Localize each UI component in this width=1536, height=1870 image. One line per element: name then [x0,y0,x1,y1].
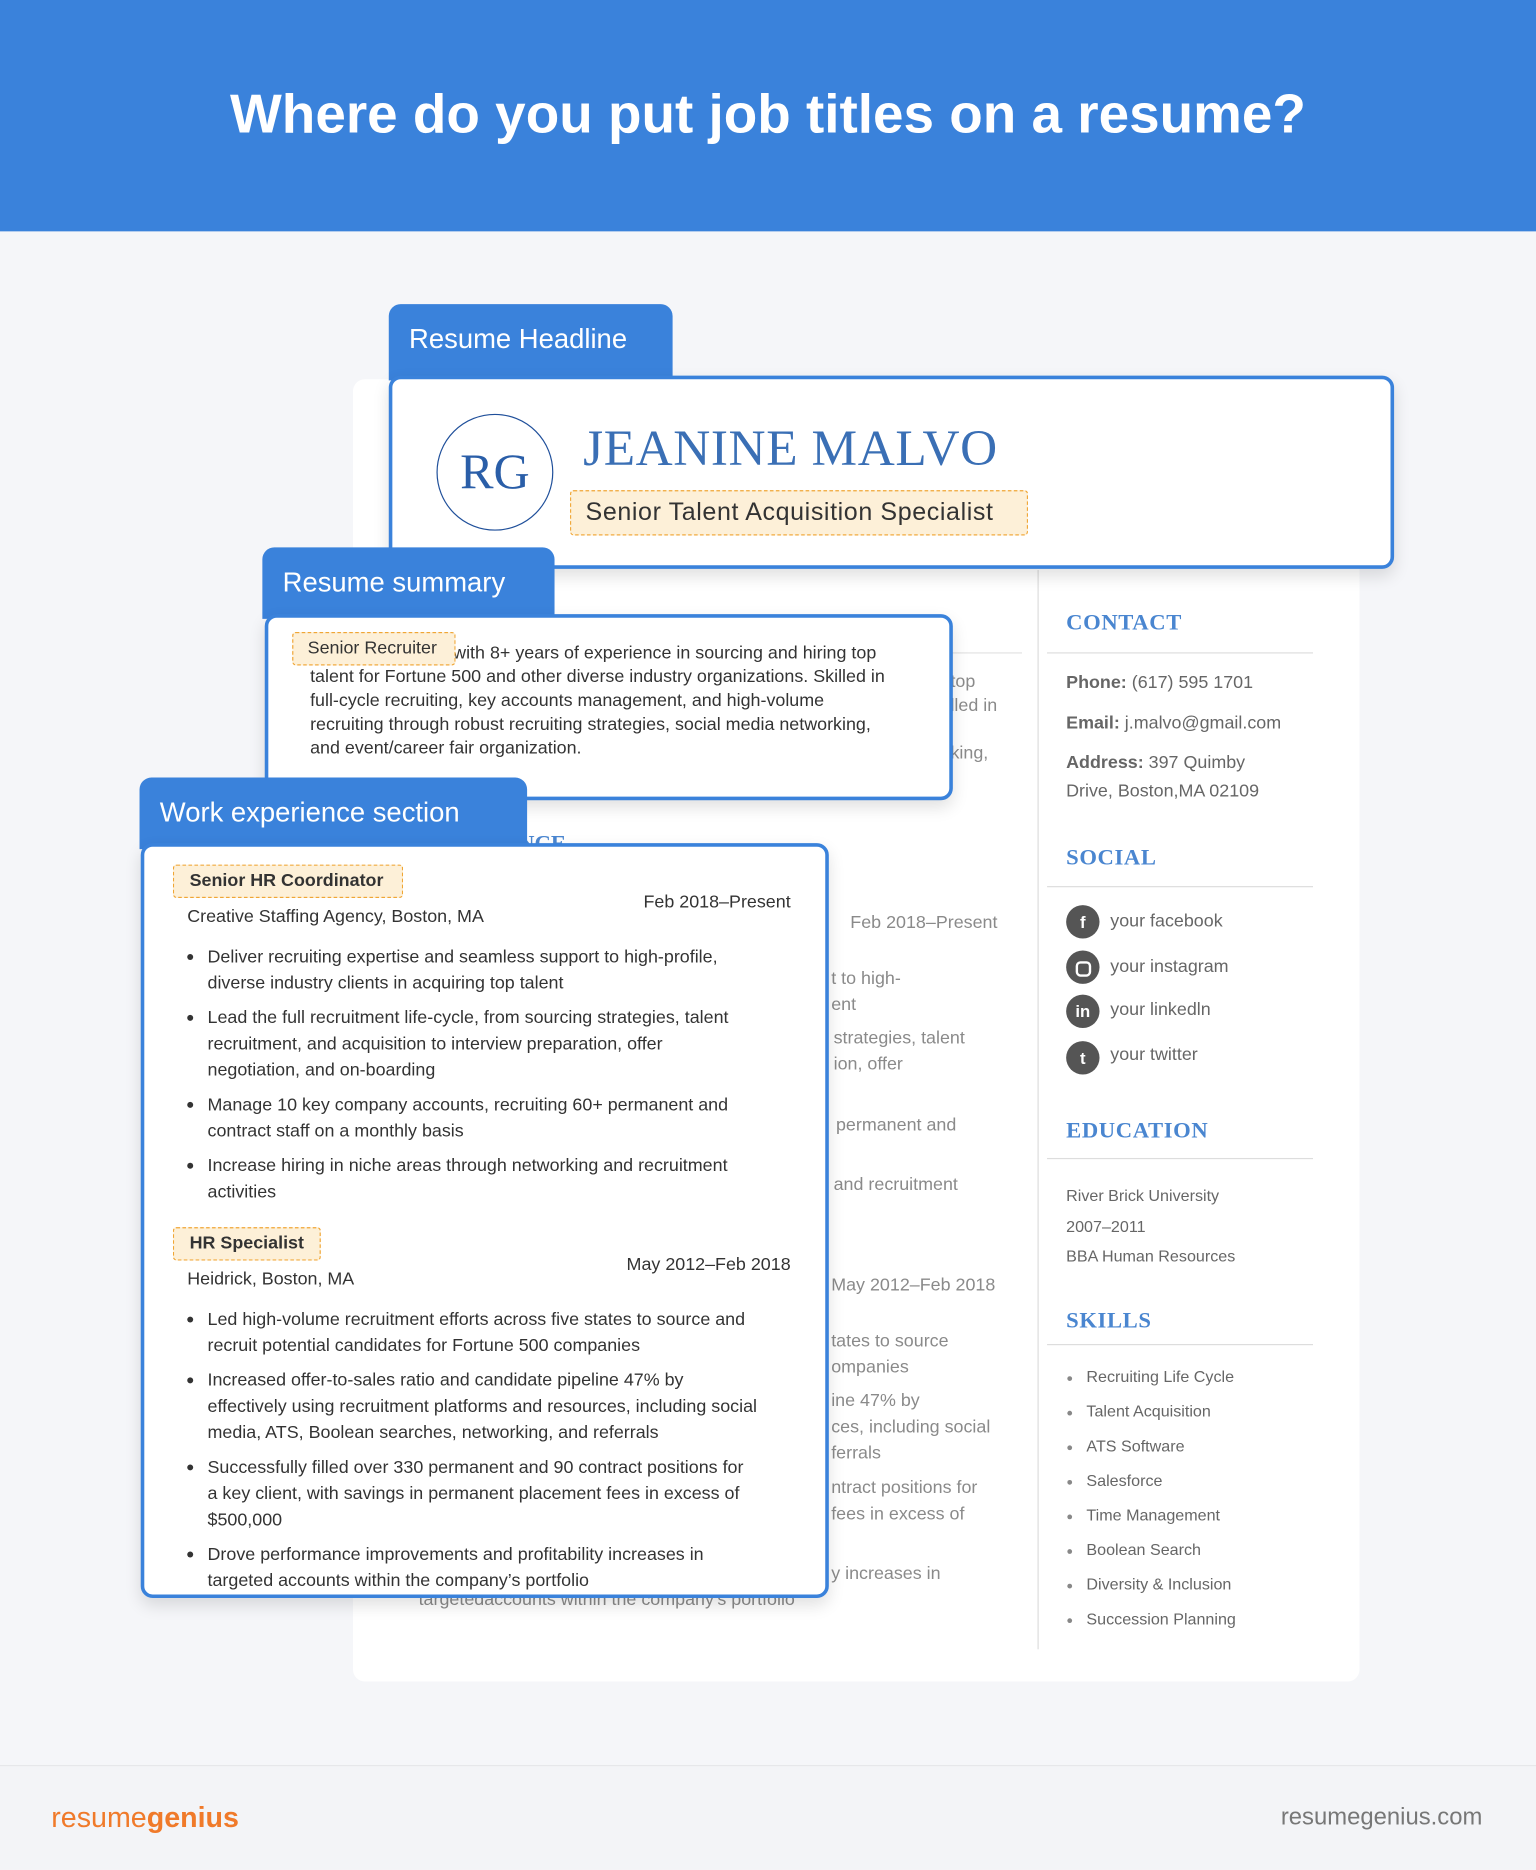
experience heading (hidden): EXPERIENCE [417,831,566,856]
text: SKILLS [1066,1308,1152,1333]
text: ompanies [831,1357,909,1377]
text: ATS Software [1086,1437,1185,1455]
card: work experience [141,843,829,1598]
text: Email: j.malvo@gmail.com [1066,713,1281,733]
icon: linkedin: in [1075,1002,1090,1021]
tab: resume summary: Resume summary [283,566,505,597]
text: your twitter [1110,1045,1198,1065]
icon: RG monogram: RG [460,445,530,500]
summary text: with 8+ years of experience in sourcing and hiring top talent for Fortune 500 and other diverse industry organizations. Skilled in full-cycle recruiting, key accounts management, and high-volume recruiting through robust recruiting strategies, social media networking, and event/career fair organization. [310,643,885,758]
job 2: Drove performance improvements and profitability increases in targeted accounts within the company’s portfolio [208,1544,704,1591]
faded background text [140,619,998,1610]
badge: senior recruiter [292,632,456,665]
text: your instagram [1110,956,1229,977]
footer [0,1765,1536,1870]
card: headline [389,376,1394,569]
left column divider [417,652,1022,654]
job 2: Led high-volume recruitment efforts across five states to source and recruit potential candidates for Fortune 500 companies [208,1309,745,1356]
icon: twitter: t [1080,1048,1086,1067]
tab: resume summary [262,547,555,619]
text: fees in excess of [831,1504,964,1524]
text: king, [950,743,988,763]
text: Boolean Search [1086,1541,1201,1559]
text: Recruiting Life Cycle [1086,1368,1234,1386]
sidebar: education [1047,1119,1313,1265]
text: tates to source [831,1331,949,1351]
job 1: Creative Staffing Agency, Boston, MA [187,906,484,927]
text: targetedaccounts within the company's portfolio [419,1590,795,1610]
icon: instagram [1066,950,1100,984]
text: ine 47% by [831,1391,920,1411]
job 1: Increase hiring in niche areas through networking and recruitment activities [208,1156,728,1202]
tab: work experience [140,778,527,849]
text: lled in [950,695,997,716]
job 1: Lead the full recruitment life-cycle, from sourcing strategies, talent recruitment, and acquisition to interview preparation, offer negotiation, and on-boarding [208,1008,728,1080]
job 1 [173,864,791,1202]
text: May 2012–Feb 2018 [831,1275,995,1295]
sidebar divider [1038,570,1039,1649]
job title badge: Senior Talent Acquisition Specialist [586,498,994,526]
text: Succession Planning [1086,1610,1236,1628]
resume paper background [353,379,1360,1681]
text: y increases in [831,1563,941,1584]
badge: senior recruiter: Senior Recruiter [308,638,437,658]
sidebar: social [1047,846,1313,1074]
job 1: Senior HR Coordinator [190,871,383,891]
text: Phone: (617) 595 1701 [1066,673,1253,693]
job 2: May 2012–Feb 2018 [627,1255,791,1275]
text: strategies, talent [834,1028,965,1048]
text: CONTACT [1066,611,1182,636]
job 1: Deliver recruiting expertise and seamless support to high-profile, diverse industry clients in acquiring top talent [208,947,718,993]
text: top [950,671,975,692]
text: your facebook [1110,911,1223,931]
text: Time Management [1086,1506,1220,1524]
tab: resume headline: Resume Headline [409,323,627,354]
text: 2007–2011 [1066,1217,1146,1235]
text: and recruitment [834,1175,958,1195]
text: ntract positions for [831,1478,977,1498]
text: ent [831,995,856,1015]
icon: facebook [1066,905,1100,939]
job title badge [570,490,1028,535]
sidebar: skills [1047,1308,1313,1628]
url: resumegenius.com [1281,1804,1482,1831]
job 2: Heidrick, Boston, MA [187,1269,354,1289]
text: t to high- [831,968,901,989]
text: ces, including social [831,1417,990,1437]
title: Where do you put job titles on a resume? [230,82,1306,144]
icon: facebook: f [1080,912,1086,931]
text: Drive, Boston,MA 02109 [1066,781,1259,801]
header banner [0,0,1536,231]
text: Address: 397 Quimby [1066,752,1245,773]
text: EDUCATION [1066,1119,1208,1144]
text: River Brick University [1066,1187,1219,1204]
text: Feb 2018–Present [850,912,997,933]
text: SOCIAL [1066,846,1157,871]
job 1: Manage 10 key company accounts, recruiting 60+ permanent and contract staff on a monthly basis [208,1095,728,1141]
card: summary [265,614,953,800]
logo: resumegenius [51,1802,239,1834]
name: JEANINE MALVO [583,421,998,477]
job 2 [173,1227,791,1591]
text: BBA Human Resources [1066,1247,1235,1265]
job 2: HR Specialist [190,1233,304,1253]
sidebar: contact [1047,611,1313,801]
icon: linkedin [1066,995,1100,1028]
text: Salesforce [1086,1472,1162,1489]
text: your linkedln [1110,999,1211,1020]
tab: work experience: Work experience section [160,797,460,828]
job 1: Feb 2018–Present [643,892,791,912]
tab: resume headline [389,304,673,380]
text: Talent Acquisition [1086,1402,1211,1420]
job 2: Successfully filled over 330 permanent and 90 contract positions for a key client, with savings in permanent placement fees in excess of $500,000 [208,1457,743,1530]
text: ion, offer [834,1054,903,1074]
icon: RG monogram [436,414,553,531]
job 2: Increased offer-to-sales ratio and candidate pipeline 47% by effectively using recruitment platforms and resources, including social media, ATS, Boolean searches, networking, and referrals [208,1370,757,1443]
text: ferrals [831,1443,881,1463]
icon: twitter [1066,1041,1100,1074]
text: permanent and [836,1115,956,1135]
text: Diversity & Inclusion [1086,1575,1231,1593]
